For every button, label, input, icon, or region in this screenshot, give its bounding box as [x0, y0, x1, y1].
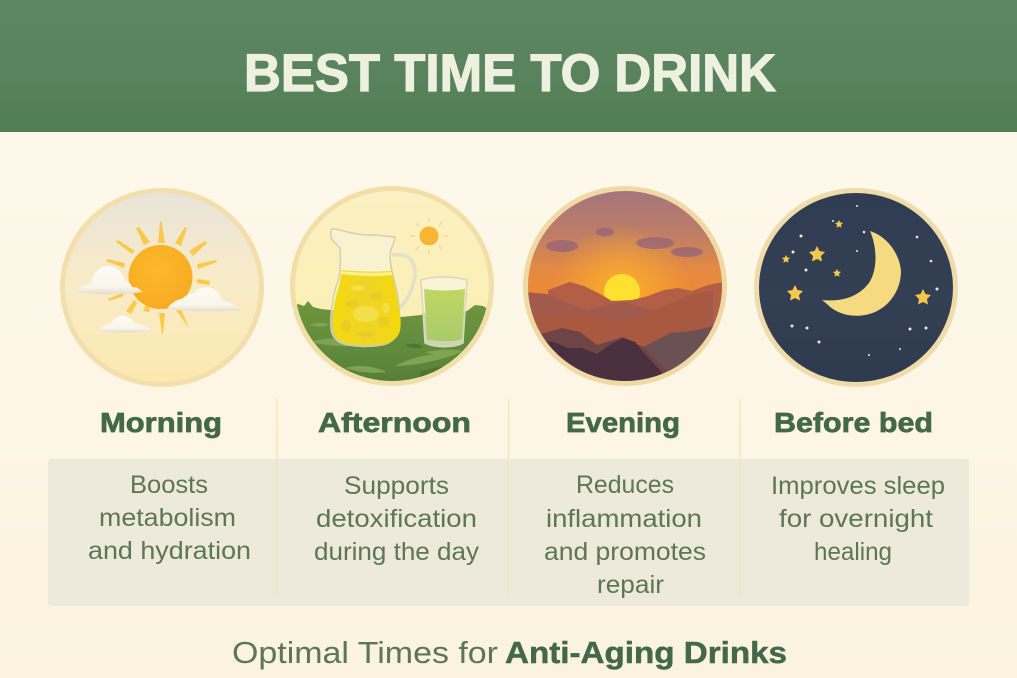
title: BEST TIME TO DRINK [244, 44, 776, 103]
header band [0, 0, 1017, 132]
text: afternoon benefit: detoxification [316, 505, 477, 533]
text: evening benefit: inflammation [546, 505, 702, 533]
footer caption [232, 635, 787, 670]
text: before bed benefit: for overnight [779, 505, 933, 533]
footer caption: Optimal Times for [232, 635, 498, 670]
text: morning benefit: Boosts [130, 471, 208, 499]
text: evening benefit: Reduces [576, 471, 674, 499]
text: evening benefit: repair [597, 571, 664, 599]
description panel [48, 459, 969, 606]
juice pulp texture [341, 292, 390, 337]
text: before bed benefit: Improves sleep [771, 472, 945, 500]
footer caption: Anti-Aging Drinks [505, 635, 787, 670]
heading: Morning: Morning [100, 407, 222, 438]
icon: evening sunset [525, 188, 728, 402]
text: afternoon benefit [314, 472, 480, 566]
heading: Evening: Evening [566, 407, 680, 438]
icon: crescent moon and stars [756, 190, 956, 384]
text: afternoon benefit: during the day [314, 538, 480, 566]
text: evening benefit: and promotes [544, 538, 706, 566]
icon: morning sun with clouds [62, 190, 262, 384]
column divider lines [277, 399, 740, 596]
text: before bed benefit: healing [814, 538, 892, 566]
icon: pitcher and glass [290, 188, 492, 389]
text: morning benefit: and hydration [88, 537, 251, 565]
text: morning benefit [88, 471, 251, 565]
text: evening benefit [544, 471, 706, 599]
heading: Before bed: Before bed [774, 407, 933, 438]
heading: Afternoon: Afternoon [318, 407, 471, 438]
text: before bed benefit [771, 472, 945, 566]
text: morning benefit: metabolism [99, 504, 236, 532]
text: afternoon benefit: Supports [344, 472, 449, 500]
